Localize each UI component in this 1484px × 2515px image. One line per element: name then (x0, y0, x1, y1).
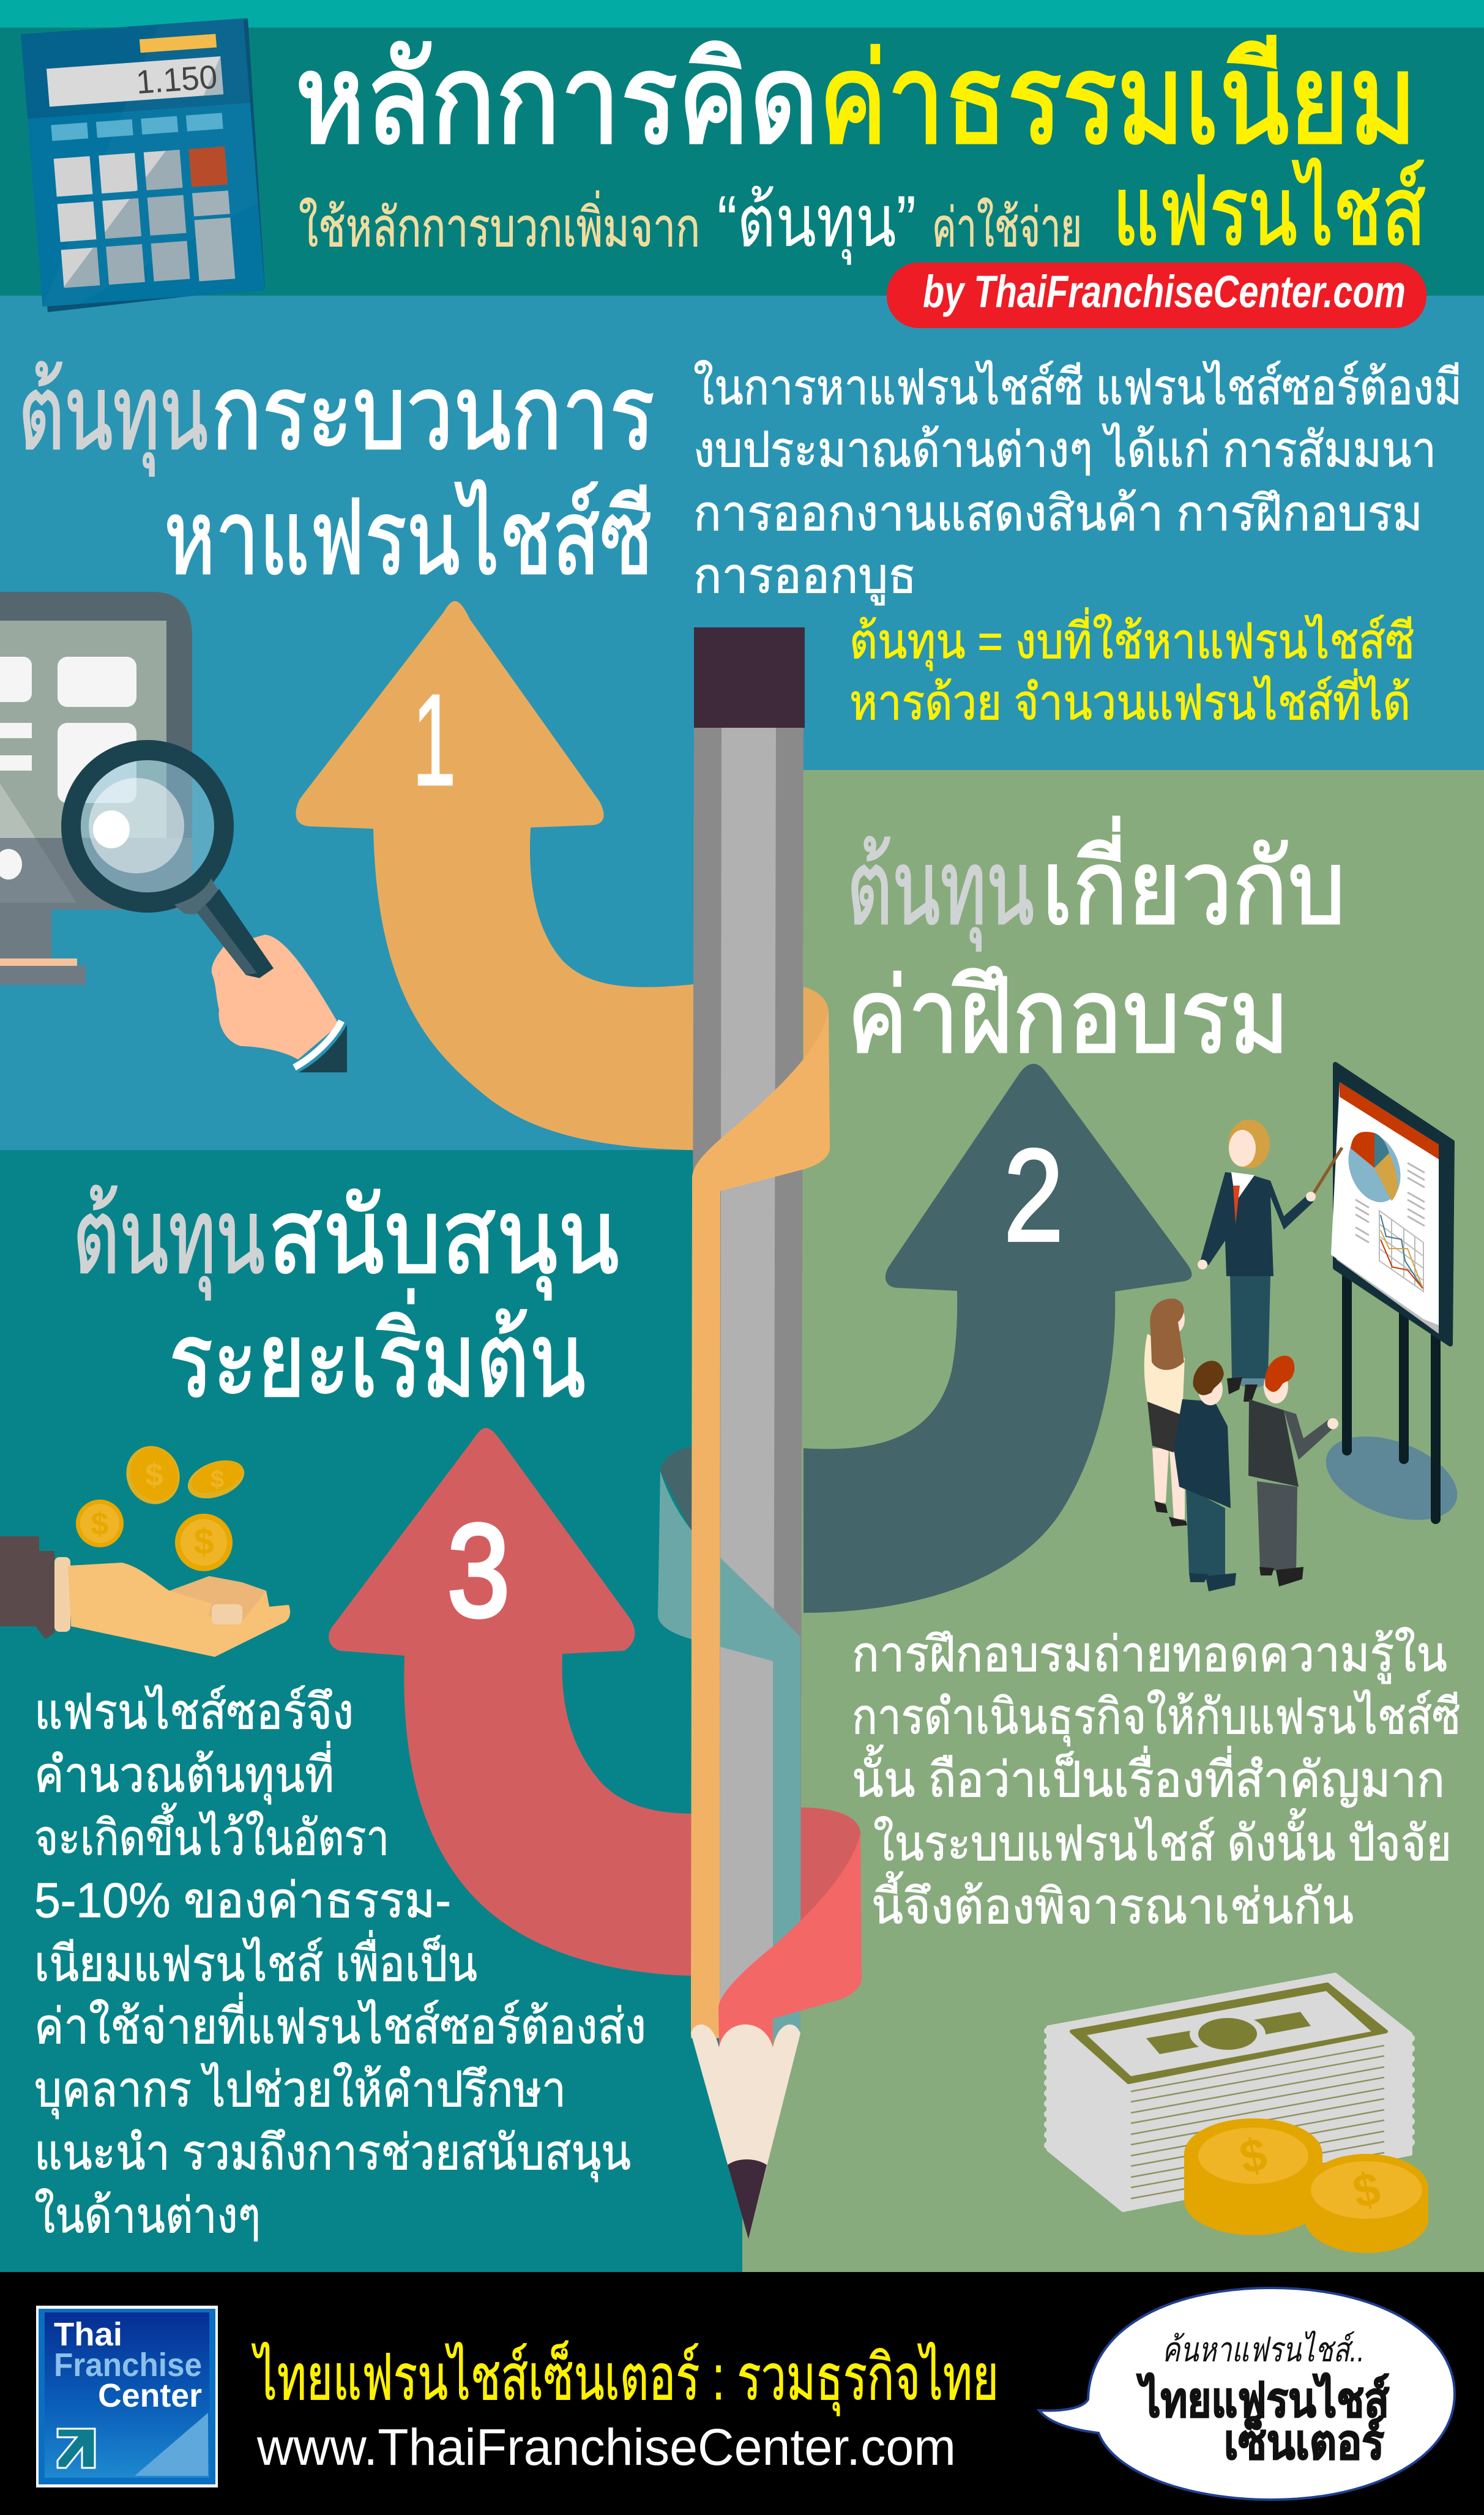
icon: hand with coins: $ (146, 1457, 163, 1493)
header panel (0, 28, 1484, 296)
icon: hand with coins: $ (211, 1466, 224, 1493)
subtitle: “ต้นทุน” (717, 181, 916, 266)
ribbon: teal wrap (658, 1471, 800, 2038)
logo: Thai Franchise Center: Center (98, 2377, 202, 2414)
text block: section 1 body (693, 359, 1462, 605)
footer text: ไทยแฟรนไชส์เซ็นเตอร์ : รวมธุรกิจไทย (252, 2340, 999, 2416)
ribbon: orange wrap (691, 1011, 830, 2038)
heading: section 2: ค่าฝึกอบรม (847, 959, 1289, 1075)
text block: section 3 body: ในด้านต่างๆ (34, 2188, 261, 2243)
title: หลักการคิด (295, 29, 819, 170)
arrow 2: 2 (1004, 1121, 1064, 1269)
text block: section 3 body: เนียมแฟรนไชส์ เพื่อเป็น (34, 1930, 477, 1991)
callout: cost formula (849, 608, 1415, 730)
panel: section 1 background (0, 296, 1484, 1153)
text block: section 2 body: นี้จึงต้องพิจารณาเช่นกัน (871, 1871, 1354, 1934)
speech bubble: เซ็นเตอร์ (1224, 2414, 1384, 2469)
text block: section 2 body: การฝึกอบรมถ่ายทอดความรู้ใน (852, 1626, 1447, 1684)
arrow 3: 3 (447, 1497, 510, 1644)
icon: stack of money with coins (1048, 1975, 1428, 2253)
text block: section 3 body: ค่าใช้จ่ายที่แฟรนไชส์ซอร์ต้องส่ง (34, 1993, 646, 2053)
text block: section 3 body: จะเกิดขึ้นไว้ในอัตรา (34, 1803, 389, 1865)
byline pill (887, 263, 1426, 328)
illustration: training presentation (1144, 1064, 1469, 1591)
heading: section 3: สนับสนุน (268, 1179, 619, 1300)
callout: cost formula: ต้นทุน = งบที่ใช้หาแฟรนไชส์ซี (849, 608, 1415, 671)
text block: section 2 body (852, 1626, 1461, 1934)
arrow 2 (660, 1064, 1191, 1613)
heading: section 1 (18, 355, 655, 596)
footer text: www.ThaiFranchiseCenter.com (256, 2418, 956, 2476)
top strip (0, 0, 1484, 28)
heading: section 3: ระยะเริ่มต้น (169, 1289, 586, 1419)
text block: section 3 body (34, 1684, 646, 2243)
arrow 1: 1 (412, 667, 456, 812)
logo: Thai Franchise Center: Thai (54, 2316, 122, 2353)
heading: section 2 (847, 817, 1346, 1075)
text block: section 2 body: นั้น ถือว่าเป็นเรื่องที่สำคัญมาก (852, 1744, 1445, 1807)
logo: Thai Franchise Center (36, 2306, 218, 2487)
subtitle (299, 159, 1426, 266)
heading: section 3 (73, 1179, 619, 1419)
text block: section 1 body: การออกบูธ (693, 548, 917, 605)
icon: computer with magnifier and hand (0, 592, 347, 1072)
text block: section 3 body: 5-10% ของค่าธรรม- (34, 1873, 451, 1927)
subtitle: ใช้หลักการบวกเพิ่มจาก (299, 190, 700, 258)
callout: cost formula: หารด้วย จำนวนแฟรนไชส์ที่ได้ (849, 669, 1411, 730)
icon: stack of money with coins: $ (1349, 2162, 1385, 2218)
text block: section 3 body: คำนวณต้นทุนที่ (34, 1741, 334, 1804)
icon: calculator (21, 18, 265, 312)
heading: section 2: ต้นทุน (847, 830, 1034, 951)
text block: section 3 body: แฟรนไชส์ซอร์จึง (34, 1684, 354, 1739)
title (295, 29, 1417, 170)
panel: section 2 background (742, 770, 1484, 2272)
speech bubble: ไทยแฟรนไชส์ (1136, 2372, 1389, 2427)
subtitle: ค่าใช้จ่าย (932, 197, 1082, 258)
logo: Thai Franchise Center: Franchise (54, 2347, 202, 2383)
icon: hand with coins (0, 1438, 290, 1657)
text block: section 3 body: แนะนำ รวมถึงการช่วยสนับสนุน (34, 2125, 631, 2182)
icon: hand with coins: $ (193, 1521, 214, 1562)
icon: stack of money with coins: $ (1236, 2128, 1272, 2184)
arrow 1 (296, 601, 830, 1163)
panel: section 3 background (0, 1150, 742, 2272)
icon: calculator: 1.150 (135, 58, 218, 101)
arrow 3 (329, 1428, 860, 1976)
heading: section 2: เกี่ยวกับ (1042, 817, 1346, 946)
pencil lead (728, 2159, 767, 2239)
text block: section 1 body: การออกงานแสดงสินค้า การฝึกอบรม (693, 486, 1423, 540)
pencil (658, 627, 862, 2239)
footer text (252, 2340, 999, 2476)
heading: section 1: หาแฟรนไชส์ซี (164, 480, 653, 596)
heading: section 1: ต้นทุน (18, 355, 208, 476)
heading: section 1: กระบวนการ (211, 355, 655, 471)
text block: section 3 body: บุคลากร ไปช่วยให้คำปรึกษา (34, 2061, 566, 2119)
icon: hand with coins: $ (91, 1506, 109, 1542)
heading: section 3: ต้นทุน (73, 1179, 265, 1300)
ribbon: red wrap (718, 1834, 862, 2050)
footer panel (0, 2272, 1484, 2515)
pencil tip (691, 2025, 800, 2239)
speech bubble (1039, 2288, 1455, 2500)
speech bubble: ค้นหาแฟรนไชส์.. (1162, 2330, 1365, 2369)
